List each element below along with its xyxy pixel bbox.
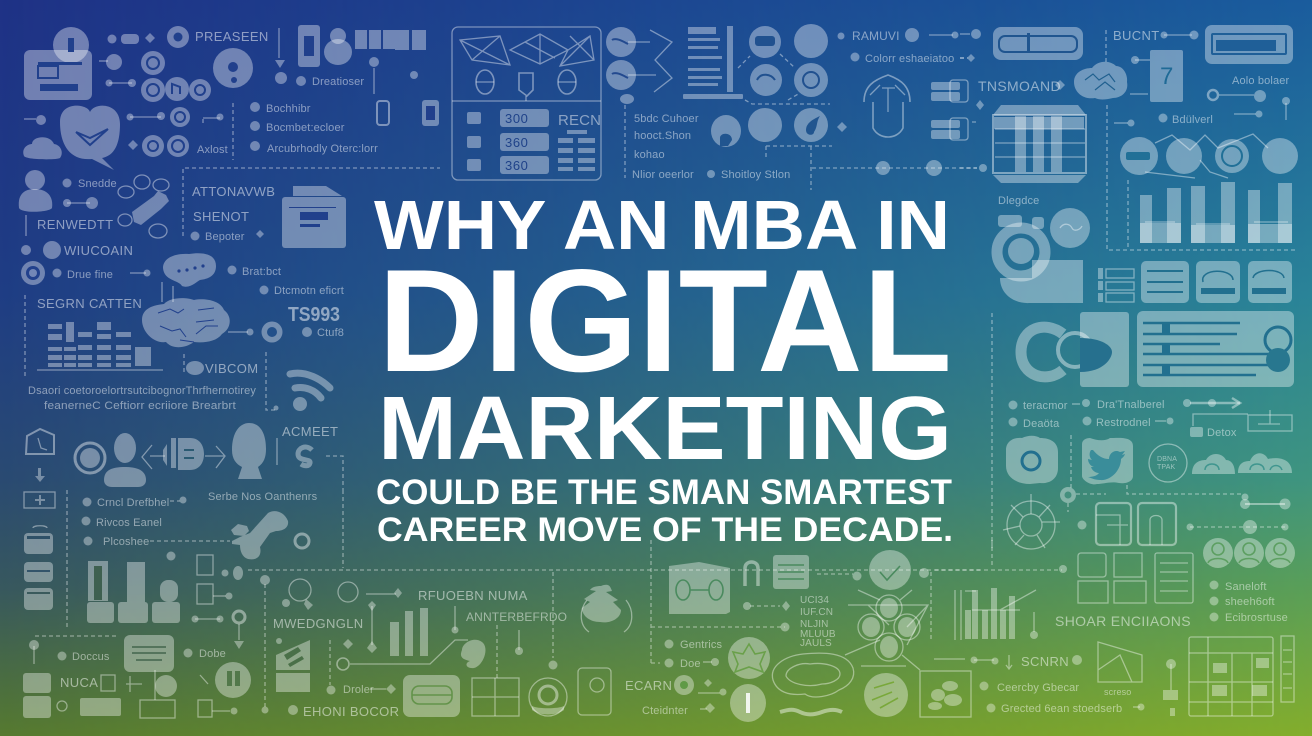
label: Cteidnter: Cteidnter [642,705,688,717]
icon: target ring with label [21,261,150,285]
label list: Crncl Drefbhel [82,496,230,548]
icon: circle with nuts [864,673,908,717]
connector [861,665,906,667]
dashboard row 2 [467,133,549,151]
icon: cloud [23,137,62,159]
label: BUCNT [1113,28,1198,43]
label: Droler: Droler [343,684,374,696]
label: Detox [1190,410,1292,439]
icon: sketch [1098,642,1142,697]
panel: ATTONAVWB folder: Bepoter [205,231,245,243]
icons: three faces [1203,538,1295,568]
icon: hexagon tablet [26,429,54,482]
labels: teracmor group: Deaöta [1023,418,1060,430]
connector network [1060,435,1290,534]
icon: wide tile [1205,25,1293,64]
label list: Bochhibr: Bocmbet:ecloer [266,122,345,134]
label: Dreatioser: Dreatioser [312,76,364,88]
icon: card [124,635,174,672]
labels: teracmor group: Dra'Tnalberel [1097,399,1165,411]
icons: circle network [738,24,830,104]
label: BUCNT: BUCNT [1113,28,1160,43]
icon: round stamp: TPAK [1157,464,1176,471]
label list: Bochhibr [233,102,378,160]
panel: left person and tools [19,170,169,285]
icons: four circles [1120,134,1298,178]
icons: bubble clusters [1192,453,1292,474]
icon: globe and person [75,433,146,487]
label: EHONI BOCOR: EHONI BOCOR [303,704,399,719]
label: Snedde [62,178,117,209]
icons: dot line row [126,107,228,157]
label: Droler [326,640,396,696]
panel: top-center dashboard [452,24,978,190]
label: PREASEEN with connectors [108,26,269,48]
label: SCNRN [934,654,1082,669]
icon: brain with gear [1006,436,1058,484]
icons: small rows [1098,268,1134,302]
panel: SEGRN CATTEN chart: SEGRN CATTEN [37,296,142,311]
icon: head [232,423,266,479]
label list: Saneloft: Saneloft [1225,581,1267,593]
label: RECN with bars: RECN [558,112,601,129]
icon: round stamp [1149,444,1187,482]
big number with ring [228,304,340,342]
icon: speech bubble with check [24,106,120,170]
icon: target ring with label: Drue fine [67,269,113,281]
title line: MARKETING: MARKETING [378,379,952,479]
icon: check circle [869,550,929,590]
label: Aolo bolaer: Aolo bolaer [1232,75,1289,87]
panel: bottom-right tools [642,538,1295,722]
icon: map pin [192,611,245,649]
labels: Doccus and Dobe: Doccus [72,651,110,663]
label: Detox: Detox [1207,427,1237,439]
label: SHOAR ENCIIAONS: SHOAR ENCIIAONS [1055,613,1191,629]
icon: arrow connector [1183,398,1240,408]
icon: tile [403,675,460,717]
connectors: dashed path [766,58,978,190]
label: WIUCOAIN: WIUCOAIN [64,243,133,258]
table: grid [993,105,1086,183]
text block: description [28,385,256,412]
label: Ceercby Gbecar: Ceercby Gbecar [997,682,1079,694]
icons: buildings [87,552,180,623]
icon: circle with white stripe [730,684,766,722]
icon: brain cloud [142,298,230,347]
label: SCNRN: SCNRN [1021,654,1069,669]
text block: Shoc Cuhoer: Nlior oeerlor [632,169,694,181]
dashboard row 3 [467,156,549,174]
text block: small: UCI34 [800,595,829,606]
icons: glasses circles [606,27,672,104]
text block: small: IUF.CN [800,607,833,618]
subtitle line: CAREER MOVE OF THE DECADE.: CAREER MOVE OF THE DECADE. [377,511,953,549]
title line: DIGITAL: DIGITAL [378,239,952,402]
icon: tablet sketch [578,668,611,715]
label: NUCA with tiles: NUCA [60,675,98,690]
text block: description: feanerneC Ceftiorr ecriiore Brearbrt [44,400,236,412]
label: Colorr eshaeiatoo: Colorr eshaeiatoo [865,53,954,65]
label: Grected 6ean stoedserb: Grected 6ean stoedserb [1001,703,1122,715]
icon: star circle [728,637,770,679]
icon: tile pair [1196,261,1292,303]
panel: left person and tools: RENWEDTT [37,217,113,232]
label: PREASEEN with connectors: PREASEEN [195,29,269,44]
icons: connected circles [99,48,253,102]
label: Bdülverl [1114,114,1213,126]
icons: luggage stack [24,492,55,610]
icon: wifi [266,352,330,411]
label: VIBCOM: VIBCOM [205,361,258,376]
chart: bars [37,322,163,370]
icon: wheel [1003,494,1086,549]
icon: thin blob [772,653,854,697]
label: Snedde: Snedde [78,178,117,190]
label: MWEDGNGLN: MWEDGNGLN [273,616,364,631]
label: Bdülverl: Bdülverl [1172,114,1213,126]
text block: Shoc Cuhoer: hooct.Shon [634,130,691,142]
icons: dot line row: Axlost [197,144,228,156]
label: Brat:bct: Brat:bct [242,266,281,278]
label: RFUOEBN NUMA: RFUOEBN NUMA [418,588,528,603]
panel: people exchange [26,423,343,490]
chart: three bar groups [1140,182,1292,243]
icons: framed leaves [197,555,243,604]
icon: ring with figure [529,678,567,716]
label: VIBCOM [184,354,258,376]
icon: folder card [669,562,730,614]
icon: large list tile [1137,311,1294,387]
chart: bar trend [955,588,1038,640]
icon: central exchange arrows [142,438,225,470]
label: ECARN connectors [674,675,726,696]
label: Ctuf8 [302,327,344,339]
icon: magnifier and face [282,579,402,610]
panel: right middle [992,208,1294,550]
label list: Saneloft [1210,580,1288,624]
text block: Shoc Cuhoer [625,105,790,181]
panel: top-right [960,25,1298,250]
panel: ATTONAVWB folder [183,168,440,248]
panel: brain and data [142,253,344,411]
label list: Crncl Drefbhel: Crncl Drefbhel [97,497,169,509]
icon: speech blob [162,253,216,302]
icon: wrench with rings [118,175,169,238]
icon: dumbbell [231,511,309,559]
labels: teracmor group: teracmor [1023,400,1068,412]
label: ACMEET [277,424,343,490]
panel: top-left icon cluster [23,25,395,170]
icons: upper-mid rectangles [369,57,439,126]
label: ANNTERBEFRDO [452,606,567,680]
chart: three bars [367,601,428,656]
text block: Shoc Cuhoer: kohao [634,149,665,161]
text block: description: Dsaori coetoroelortrsutcibognorThrfhernotirey [28,385,256,397]
icon: table [472,678,519,716]
label: TNSMOAND: TNSMOAND [978,78,1061,94]
label: ANNTERBEFRDO: ANNTERBEFRDO [466,610,567,624]
text block: small [800,595,836,649]
chart: grid table [1189,636,1294,716]
label: ACMEET: ACMEET [282,424,338,439]
label list: Saneloft: Ecibrosrtuse [1225,612,1288,624]
icon: molecule network [845,590,928,670]
icons: three ovals [476,70,576,101]
icon: briefcase with pin [24,27,92,100]
labels: teracmor group: Restrodnel [1096,417,1151,429]
label: Cteidnter [642,703,715,717]
icon: head with circuit [864,75,910,137]
icon: layered figure [581,585,632,632]
dashboard row 2: 360 [505,135,528,150]
icon: triple lattice [460,34,594,66]
subtitle line: COULD BE THE SMAN SMARTEST: COULD BE THE SMAN SMARTEST [376,473,952,512]
label: RECN with bars [558,112,601,171]
icon: circle with cards [198,662,251,717]
icon: patterned rug [276,638,310,692]
text block: Shoc Cuhoer: 5bdc Cuhoer [634,113,699,125]
label: Ctuf8: Ctuf8 [317,327,344,339]
label: Dlegdce: Dlegdce [998,195,1039,207]
icon: list tile [1141,261,1189,303]
icon: pin stack [1163,659,1178,716]
label: NUCA with tiles [23,670,177,718]
labels: teracmor group [1008,399,1174,430]
icon: twitter tile [1082,438,1133,484]
label: RAMUVI [838,28,958,43]
label: Serbe Nos Oanthenrs: Serbe Nos Oanthenrs [208,491,318,503]
label: Doe [664,658,719,670]
big number with ring: TS993 [288,304,340,326]
connector rings [1208,90,1290,120]
icon: sketch: screso [1104,687,1131,697]
icon: phone [1130,50,1183,102]
dashboard row 1 [467,109,549,127]
label: Dtcmotn eficrt: Dtcmotn eficrt [274,285,344,297]
icon: swirl connector [337,640,486,670]
dashboard row 3: 360 [505,158,528,173]
text block: small: NLJIN [800,619,829,630]
label list: Crncl Drefbhel: Rivcos Eanel [96,517,162,529]
icons: thin outline cards [1078,553,1193,603]
icon: lock block [395,30,426,50]
dashboard row 1: 300 [505,111,528,126]
title [374,186,953,549]
icon: wave connector [780,710,842,714]
connector [960,29,981,62]
label: WIUCOAIN [43,241,133,259]
label list: Saneloft: sheeh6oft [1225,596,1275,608]
icon: gear with brain [997,208,1090,303]
labels: Doccus and Dobe [29,640,226,664]
icons: server stacks [931,80,968,140]
icon: phone: 7 [1160,63,1173,90]
title line: WHY AN MBA IN: WHY AN MBA IN [374,186,950,264]
label: ECARN: ECARN [625,678,672,693]
panel: SEGRN CATTEN chart [25,295,256,412]
icon: cloud brain [1074,62,1127,100]
label list: Bochhibr: Arcubrhodly Oterc:lorr [267,143,378,155]
panel: upper mid devices [369,30,439,126]
labels: Doccus and Dobe: Dobe [199,648,226,660]
icon: world square [1080,312,1129,387]
label list: Crncl Drefbhel: Plcoshee [103,536,149,548]
icon: laptop document [683,26,743,99]
panel: ATTONAVWB folder: ATTONAVWB [192,184,275,199]
icon: framed maps [1096,503,1176,545]
panel: ATTONAVWB folder: SHENOT [193,209,249,224]
connectors: center dots [743,601,790,632]
text block: small: JAULS [800,638,832,649]
label: RAMUVI: RAMUVI [852,29,900,43]
label: Dreatioser [275,72,364,88]
label: Gentrics: Gentrics [680,639,723,651]
text block: Shoc Cuhoer: Shoitloy Stlon [721,169,790,181]
icon: tile with bar [993,27,1083,60]
icon: round stamp: DBNA [1157,456,1177,463]
icon: person [19,170,52,212]
icon: devices and figure [275,25,395,68]
text block: small: MLUUB [800,629,836,640]
label: Doe: Doe [680,658,701,670]
icons: lower circles [711,108,847,147]
icon: folder [282,186,346,248]
panel: bottom-center tools [260,572,672,719]
panel: bottom-left services [23,490,980,718]
icon: framed cluster [920,671,971,717]
label list: Bochhibr: Bochhibr [266,103,311,115]
icon: lock and document [745,555,809,589]
connector [817,572,862,580]
icon: C shape with coin [1021,327,1092,377]
